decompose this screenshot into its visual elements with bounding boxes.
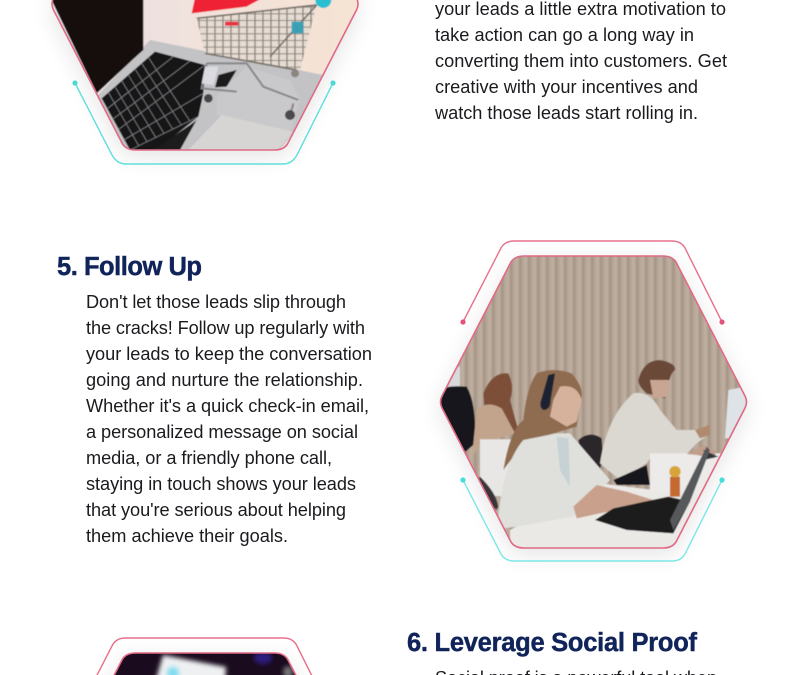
panel: tip 5 photo hexagon bbox=[433, 241, 753, 561]
text block: tip 4 body: watch those leads start rolling in. bbox=[434, 103, 698, 123]
photo: glowing social app icon bbox=[115, 654, 295, 675]
text block: tip 5 body: your leads to keep the conversation bbox=[86, 344, 372, 364]
text block: tip 5 body: a personalized message on social bbox=[86, 422, 358, 442]
text block: tip 5 body: Don't let those leads slip through bbox=[86, 292, 346, 312]
pink top bracket with end dots bbox=[460, 241, 725, 325]
text block: tip 5 body: them achieve their goals. bbox=[86, 526, 288, 546]
text block: tip 5 body: staying in touch shows your leads bbox=[86, 474, 356, 494]
hexagon shadow bbox=[52, 659, 358, 675]
panel: tip 4 photo hexagon bbox=[50, 0, 360, 165]
text block: tip 4 body: converting them into customers. Get bbox=[435, 51, 727, 71]
text block: tip 5 body bbox=[86, 292, 372, 546]
heading: 6. Leverage Social Proof: 6. Leverage Social Proof bbox=[407, 629, 698, 657]
pink top bracket bbox=[74, 638, 334, 675]
inner pink outline bbox=[52, 0, 358, 150]
text block: tip 4 body bbox=[434, 0, 727, 123]
text block: tip 5 body: media, or a friendly phone call, bbox=[86, 448, 332, 468]
heading: 5. Follow Up: 5. Follow Up bbox=[57, 253, 202, 281]
panel: tip 6 photo hexagon bbox=[96, 637, 312, 675]
hexagon shadow bbox=[52, 0, 358, 156]
photo: call centre agents at laptops bbox=[441, 256, 746, 546]
text block: tip 5 body: that you're serious about helping bbox=[86, 500, 346, 520]
text block: tip 4 body: take action can go a long way in bbox=[435, 25, 694, 45]
cyan bracket with end dots bbox=[72, 80, 336, 164]
inner pink outline bbox=[52, 653, 358, 675]
cyan bottom bracket with end dots bbox=[460, 477, 725, 561]
text block: tip 4 body: creative with your incentives and bbox=[435, 77, 698, 97]
hexagon shadow bbox=[440, 262, 746, 554]
inner pink outline bbox=[440, 256, 746, 548]
text block: tip 5 body: Whether it's a quick check-in email, bbox=[86, 396, 369, 416]
text block: tip 5 body: the cracks! Follow up regularly with bbox=[86, 318, 365, 338]
photo: laptop with shopping cart bbox=[52, 0, 358, 150]
text block: tip 5 body: going and nurture the relationship. bbox=[86, 370, 363, 390]
